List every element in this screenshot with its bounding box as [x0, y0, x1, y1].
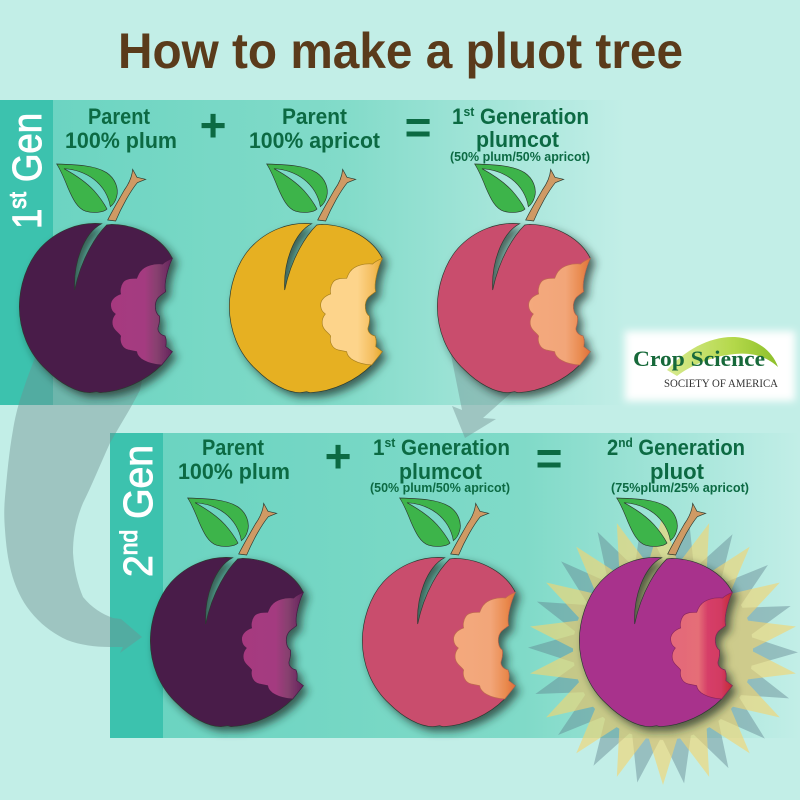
plus sign: +: [325, 430, 351, 482]
icon: 2nd gen plum fruit: [150, 498, 303, 727]
heading: 2nd Gen: Gen: [115, 445, 161, 530]
heading: 1st Gen: 1: [4, 206, 50, 229]
text: 2nd gen plumcot parent: plumcot: [399, 459, 483, 484]
icon: 2nd gen plumcot fruit: [362, 498, 515, 727]
text: 2nd gen parent plum: 100% plum: [178, 459, 290, 484]
text: 2nd gen plumcot parent: [370, 435, 510, 495]
logo: Crop Science Society of America: SOCIETY OF AMERICA: [664, 378, 779, 390]
plus sign: +: [200, 99, 226, 151]
panel: 2nd Gen label tab: [110, 433, 163, 738]
text: 1st generation plumcot: [450, 104, 590, 164]
icon: pluot fruit: [579, 498, 732, 727]
text: parent plum: Parent: [88, 104, 151, 129]
text: 2nd gen parent plum: [178, 435, 290, 484]
text: 1st generation plumcot: plumcot: [476, 127, 560, 152]
text: 2nd gen plumcot parent: 1: [373, 435, 385, 460]
text: 2nd generation pluot: Generation: [633, 435, 745, 460]
text: 1st generation plumcot: Generation: [474, 104, 589, 129]
text: 2nd gen plumcot parent: (50% plum/50% apricot): [370, 481, 510, 495]
text: 1st generation plumcot: 1: [452, 104, 464, 129]
equals sign: =: [536, 432, 562, 484]
text: 2nd generation pluot: (75%plum/25% apricot): [611, 481, 749, 495]
text: 2nd generation pluot: nd: [618, 435, 633, 450]
arrow: plum parent to 2nd generation: [4, 345, 143, 653]
text: 1st generation plumcot: (50% plum/50% apricot): [450, 150, 590, 164]
text: parent apricot: Parent: [282, 104, 348, 129]
arrow: plumcot to 2nd generation: [450, 350, 520, 438]
text: parent apricot: [249, 104, 381, 153]
text: parent apricot: 100% apricot: [249, 128, 381, 153]
heading: 2nd Gen: nd: [116, 530, 143, 555]
panel: 2nd generation band: [110, 433, 800, 738]
text: parent plum: [65, 104, 177, 153]
icon: plumcot fruit: [437, 164, 590, 393]
logo: Crop Science Society of America: Crop Science: [633, 346, 765, 371]
text: 2nd gen plumcot parent: Generation: [395, 435, 510, 460]
equals sign: =: [405, 101, 431, 153]
text: 2nd generation pluot: pluot: [650, 459, 705, 484]
panel: 1st generation band: [0, 100, 625, 405]
text: 2nd gen parent plum: Parent: [202, 435, 265, 460]
heading: 2nd Gen: 2: [115, 554, 161, 577]
icon: plum fruit: [19, 164, 172, 393]
text: 2nd gen plumcot parent: st: [384, 435, 396, 450]
starburst: grey spikes: [504, 492, 800, 800]
text: 2nd generation pluot: [607, 435, 749, 495]
heading: 1st Gen: st: [5, 192, 32, 209]
heading: 1st Gen: Gen: [4, 113, 50, 192]
icon: apricot fruit: [229, 164, 382, 393]
logo: Crop Science Society of America: [625, 331, 795, 401]
text: 2nd generation pluot: 2: [607, 435, 619, 460]
starburst: yellow spikes: [527, 515, 799, 785]
text: 1st generation plumcot: st: [463, 104, 475, 119]
starburst behind pluot: [504, 492, 800, 800]
text: parent plum: 100% plum: [65, 128, 177, 153]
title: How to make a pluot tree: [118, 23, 683, 79]
panel: 1st Gen label tab: [0, 100, 53, 405]
